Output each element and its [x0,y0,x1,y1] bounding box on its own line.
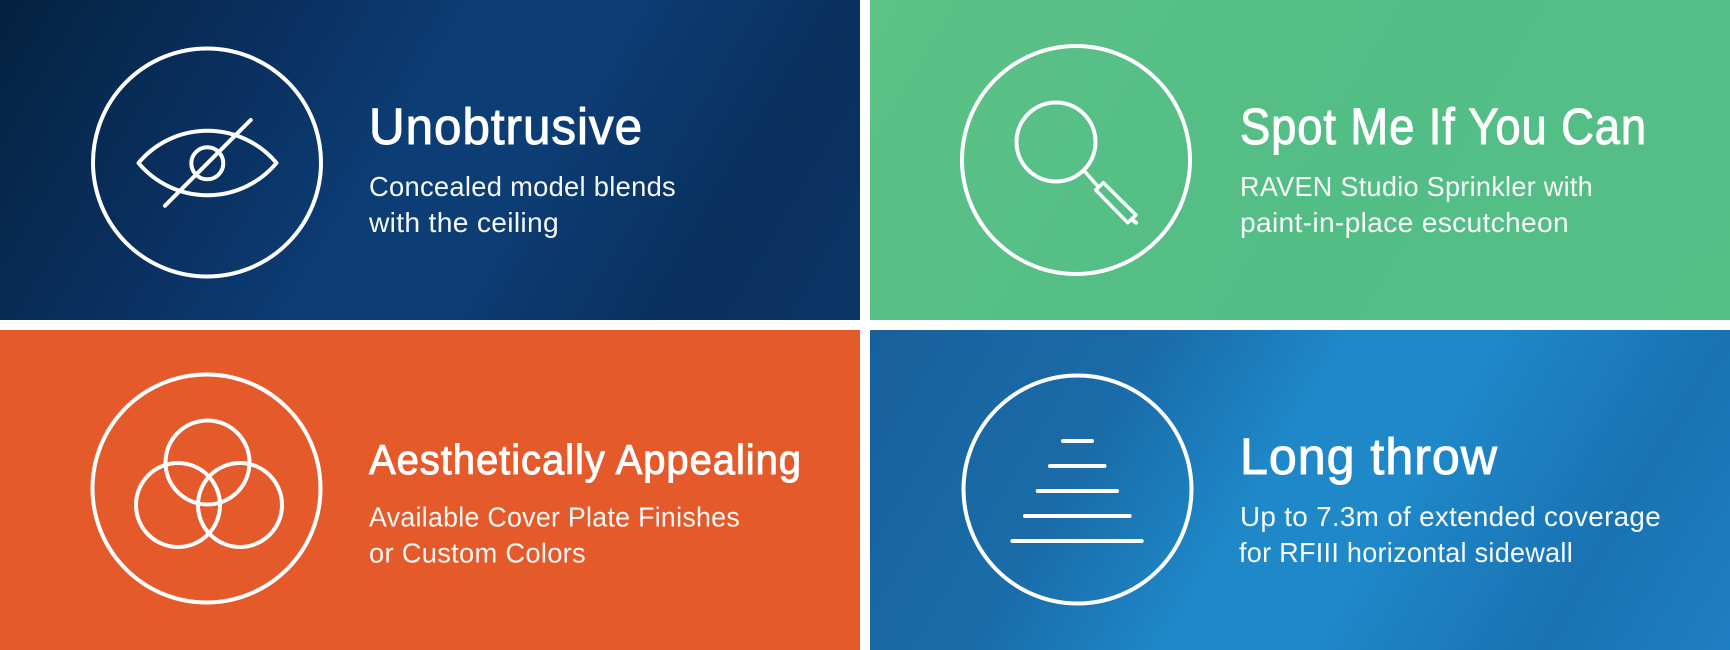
text: Aesthetically Appealing description: or Custom Colors [369,538,586,568]
text: Unobtrusive description: Concealed model blends [369,171,676,202]
text: Aesthetically Appealing description: Available Cover Plate Finishes [369,502,740,532]
text: Spot Me description: paint-in-place escutcheon [1240,207,1569,238]
icon: overlapping circles [92,374,320,602]
icon: eye crossed out [93,48,321,276]
text: Long throw description: Up to 7.3m of extended coverage [1240,501,1661,532]
panel: Long throw [870,330,1730,650]
text: Long throw description: for RFIII horizontal sidewall [1239,537,1573,568]
heading: Unobtrusive: Unobtrusive [369,98,643,155]
heading: Aesthetically Appealing: Aesthetically Appealing [369,436,802,483]
panel: Aesthetically Appealing [0,330,860,650]
heading: Long throw: Long throw [1240,428,1498,485]
text: Unobtrusive description: with the ceiling [368,207,559,238]
panel: Spot Me If You Can [870,0,1730,320]
panel: Unobtrusive [0,0,860,320]
heading: Spot Me If You Can: Spot Me If You Can [1240,98,1647,155]
icon: magnifying glass [962,46,1190,274]
text: Spot Me description: RAVEN Studio Sprinkler with [1240,171,1593,202]
icon: widening lines [964,376,1192,604]
